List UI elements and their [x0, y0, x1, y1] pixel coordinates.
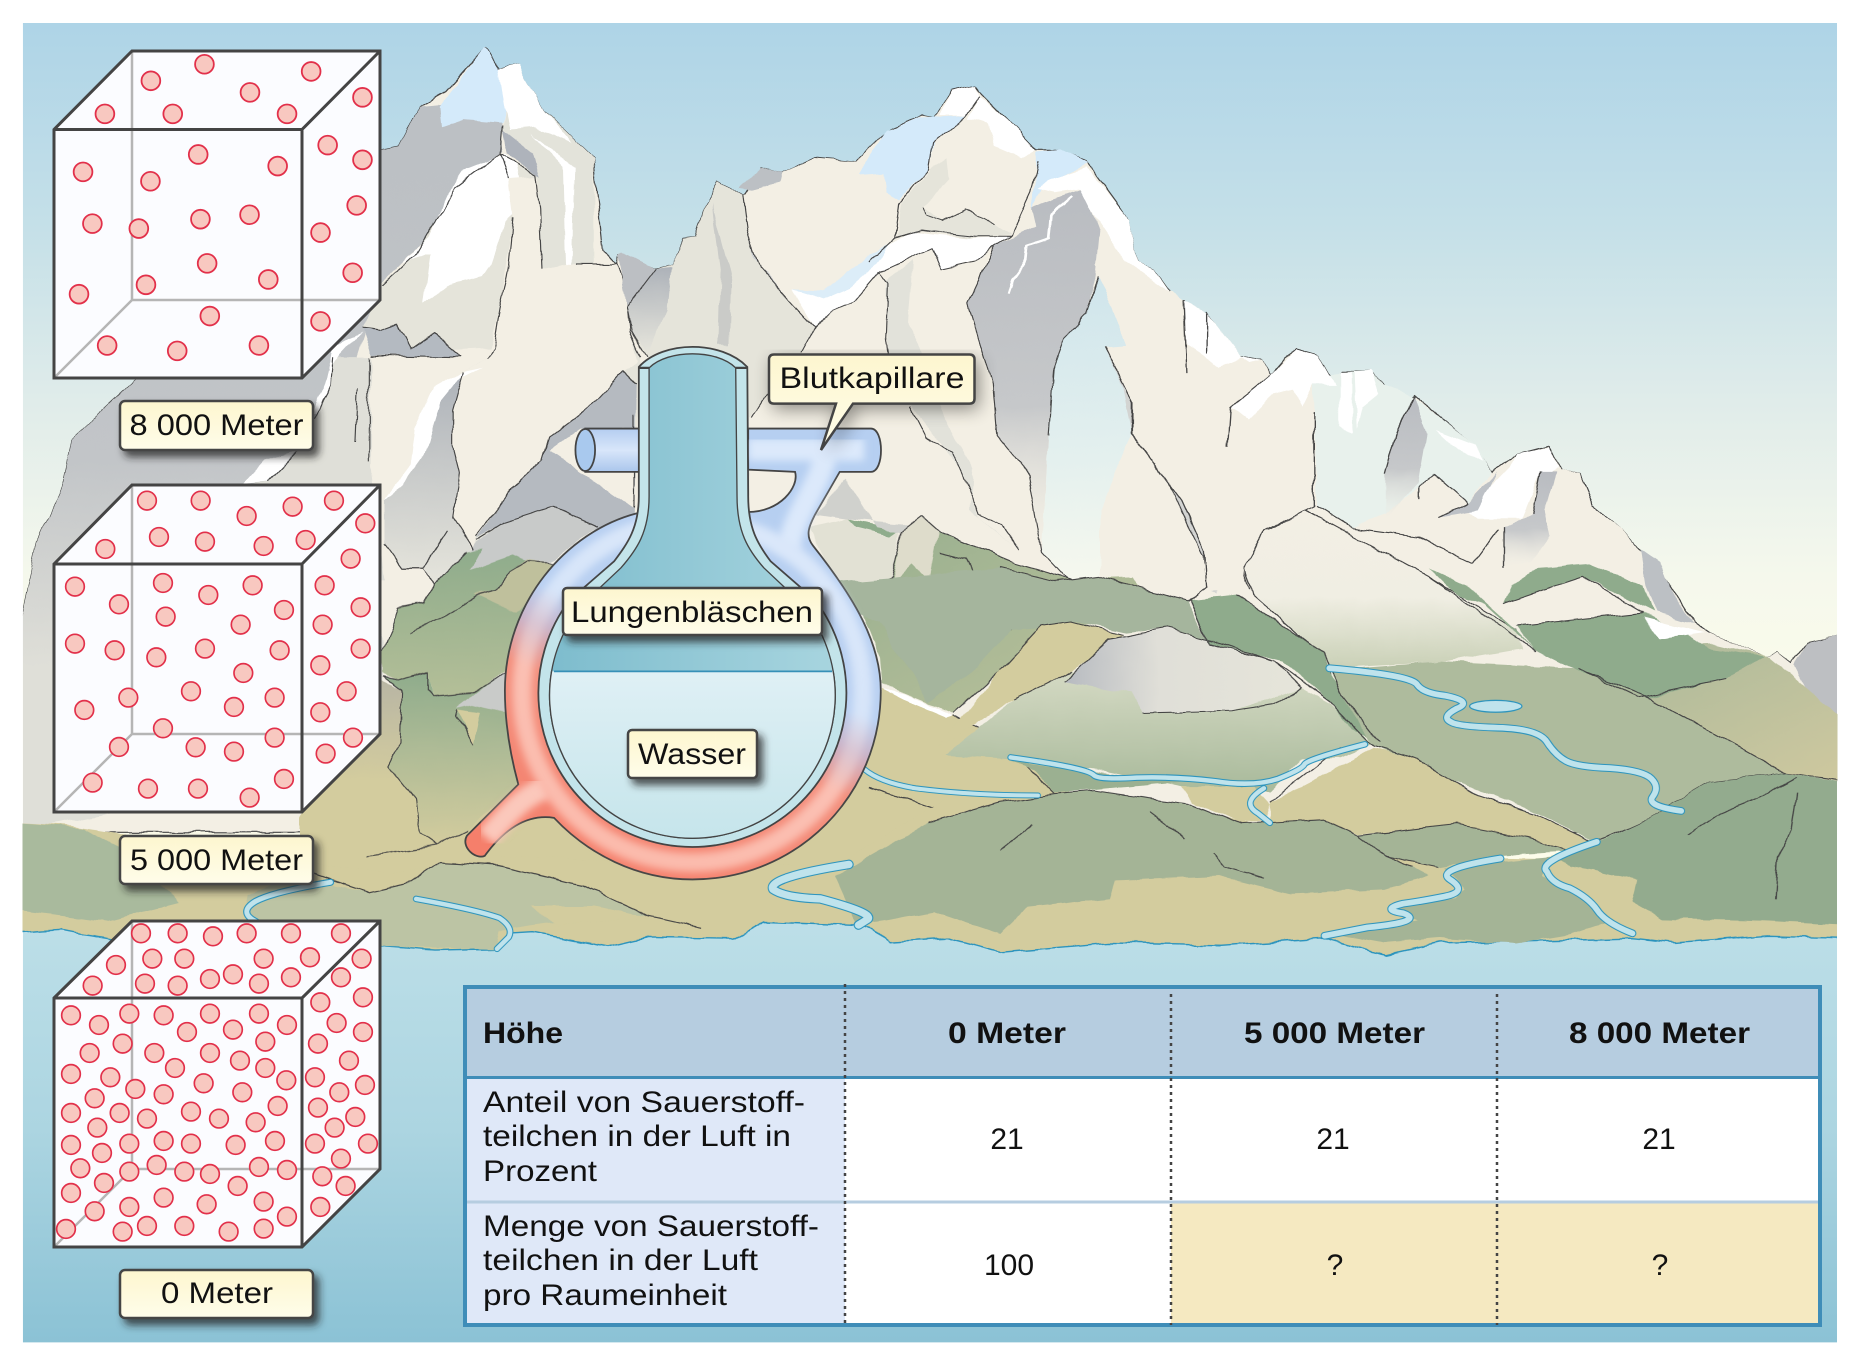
hill lines [928, 778, 1797, 898]
rivers [247, 668, 1681, 949]
base beige of left ridge [627, 181, 814, 510]
header row: 8 000 Meter [1569, 1017, 1750, 1050]
row: share of oxygen particles: 21 [1642, 1123, 1676, 1156]
label: 0 Meter [120, 1270, 313, 1318]
oxygen particles 8000 [70, 55, 372, 360]
grey couloirs [1106, 348, 1218, 594]
row: amount of oxygen particles: pro Raumeinheit [483, 1279, 728, 1312]
white summit [1231, 350, 1335, 421]
row: amount of oxygen particles: ? [1652, 1249, 1668, 1282]
table cells [465, 987, 1820, 1325]
small rock cap [738, 167, 783, 190]
row: share of oxygen particles: 21 [1316, 1123, 1350, 1156]
header row [483, 1017, 1750, 1050]
central and right valley [802, 563, 1858, 851]
white streak [384, 366, 482, 500]
shadow column [886, 260, 1004, 539]
foothills [300, 479, 1858, 916]
centre massif details [618, 86, 1299, 602]
alveolus diagram [465, 347, 881, 879]
top snow [939, 86, 979, 116]
valley lines [1000, 568, 1837, 842]
right spire [1640, 550, 1693, 624]
label: Lungenbläschen: Lungenbläschen [571, 596, 813, 629]
snow teeth [1184, 300, 1242, 367]
grey spire [1385, 395, 1426, 519]
grey wedge [457, 672, 510, 713]
cream right of glacier [1000, 114, 1036, 150]
data table [465, 984, 1820, 1325]
hill green lower [383, 672, 520, 845]
label: Wasser [628, 730, 757, 778]
centre hill [835, 773, 1858, 943]
right summit snow [1038, 167, 1169, 292]
second summit snow [402, 154, 525, 304]
green river bank [1011, 760, 1181, 793]
label: 0 Meter: 0 Meter [161, 1277, 273, 1310]
right hill [1550, 773, 1858, 925]
green foothill [855, 517, 1159, 713]
olive coastal plain [12, 794, 1855, 955]
oxygen particles 5000 [66, 491, 375, 807]
lowland and coast [12, 773, 1858, 955]
grey under streak [384, 371, 473, 585]
grey hill [1063, 628, 1302, 713]
label: 8000 Meter: 8 000 Meter [130, 409, 304, 442]
left lowland [12, 823, 178, 921]
olive triangle [1269, 749, 1594, 851]
right cream shoulder [1094, 220, 1270, 376]
cream patch [1503, 577, 1643, 626]
ice valley [1042, 277, 1131, 579]
far summit rock [1503, 472, 1555, 568]
upper right olive slope [1577, 644, 1858, 784]
cube: 0 metres [54, 921, 380, 1247]
dark rock under glacier [498, 65, 594, 270]
header row: Höhe [483, 1017, 563, 1050]
lower left rock [254, 356, 385, 580]
green upper patches [1429, 568, 1536, 650]
right ridge details [1104, 291, 1858, 738]
mountain range [12, 47, 1858, 832]
row: share of oxygen particles: Prozent [483, 1155, 598, 1188]
cube: 8000 metres [54, 51, 380, 378]
callout: Blutkapillare: Blutkapillare [780, 362, 964, 395]
teeth snow [1185, 300, 1261, 362]
cream slope [1245, 510, 1522, 668]
olive nook [457, 710, 480, 745]
lower centre cream [750, 246, 1069, 581]
olive left of river [1181, 787, 1269, 822]
blood capillary [465, 429, 881, 879]
pale ice ridge [1313, 371, 1492, 528]
shoreline [12, 921, 1855, 955]
olive backing under flask [321, 743, 1070, 916]
label: 5000 Meter: 5 000 Meter [130, 844, 303, 877]
cube: 5000 metres [54, 485, 380, 812]
sky [22, 23, 1837, 859]
white vein [1008, 196, 1073, 294]
shaded slab [897, 158, 1011, 238]
alveolus wall [538, 347, 846, 847]
ice saddle and snow band [792, 232, 1011, 328]
row: amount of oxygen particles: 100 [984, 1249, 1034, 1282]
grey rock face [968, 190, 1101, 502]
sea [12, 904, 1855, 1355]
gray left massif [12, 105, 502, 832]
olive hill [939, 621, 1124, 746]
beige crest [891, 517, 938, 586]
pale basin [945, 671, 1374, 791]
grey back slope [815, 479, 1070, 579]
green band [1190, 595, 1418, 755]
hill lines [368, 552, 557, 856]
olive crest [473, 560, 557, 613]
patch [529, 906, 648, 925]
top band [802, 568, 1209, 702]
row: share of oxygen particles [483, 1086, 1676, 1188]
row: amount of oxygen particles: Menge von Sauerstoff- [483, 1210, 819, 1243]
header row: 0 Meter [948, 1017, 1066, 1050]
second summit body [362, 154, 641, 549]
lowland pale green [244, 862, 648, 949]
far summit body [1440, 446, 1693, 621]
olive hill right of flask [846, 688, 1056, 818]
row: share of oxygen particles: teilchen in der Luft in [483, 1120, 791, 1153]
left summit details [232, 47, 656, 594]
foothills right of flask [808, 479, 1159, 818]
glacier [440, 47, 507, 127]
valley slope [1330, 662, 1786, 842]
label: Lungenbläschen [563, 588, 822, 635]
alveolus water [550, 354, 835, 838]
summit snow [498, 65, 571, 143]
label: 5000 Meter [120, 836, 313, 884]
callout: Blutkapillare [769, 354, 978, 455]
label: 8000 Meter [120, 401, 313, 450]
dark rock near flask [475, 371, 636, 538]
hill green upper [382, 548, 557, 697]
row: amount of oxygen particles [483, 1210, 1668, 1312]
right rock [1794, 635, 1858, 738]
beige knolls [808, 519, 900, 595]
lines [1104, 300, 1561, 675]
rock strip [362, 324, 462, 357]
lower river bank [1335, 857, 1605, 943]
lines [627, 97, 1299, 602]
alveolus air [550, 354, 835, 838]
under olive [300, 680, 520, 900]
cream shoulder [1104, 291, 1316, 590]
cream column [453, 176, 638, 549]
glacier [859, 116, 966, 200]
far summit snow [1467, 447, 1558, 519]
cream peak [743, 87, 976, 272]
right summit ice [1031, 149, 1089, 209]
cream base ridge [1357, 474, 1473, 563]
left foothills near flask [300, 548, 557, 900]
cream left band [371, 356, 462, 500]
row: share of oxygen particles: 21 [990, 1123, 1024, 1156]
row: amount of oxygen particles: teilchen in der Luft [483, 1244, 759, 1277]
label: Wasser: Wasser [638, 738, 746, 771]
row: amount of oxygen particles: ? [1327, 1249, 1343, 1282]
header row: 5 000 Meter [1244, 1017, 1425, 1050]
row: share of oxygen particles: Anteil von Sauerstoff- [483, 1086, 805, 1119]
lines [268, 125, 656, 585]
oxygen particles 0 [57, 924, 377, 1241]
